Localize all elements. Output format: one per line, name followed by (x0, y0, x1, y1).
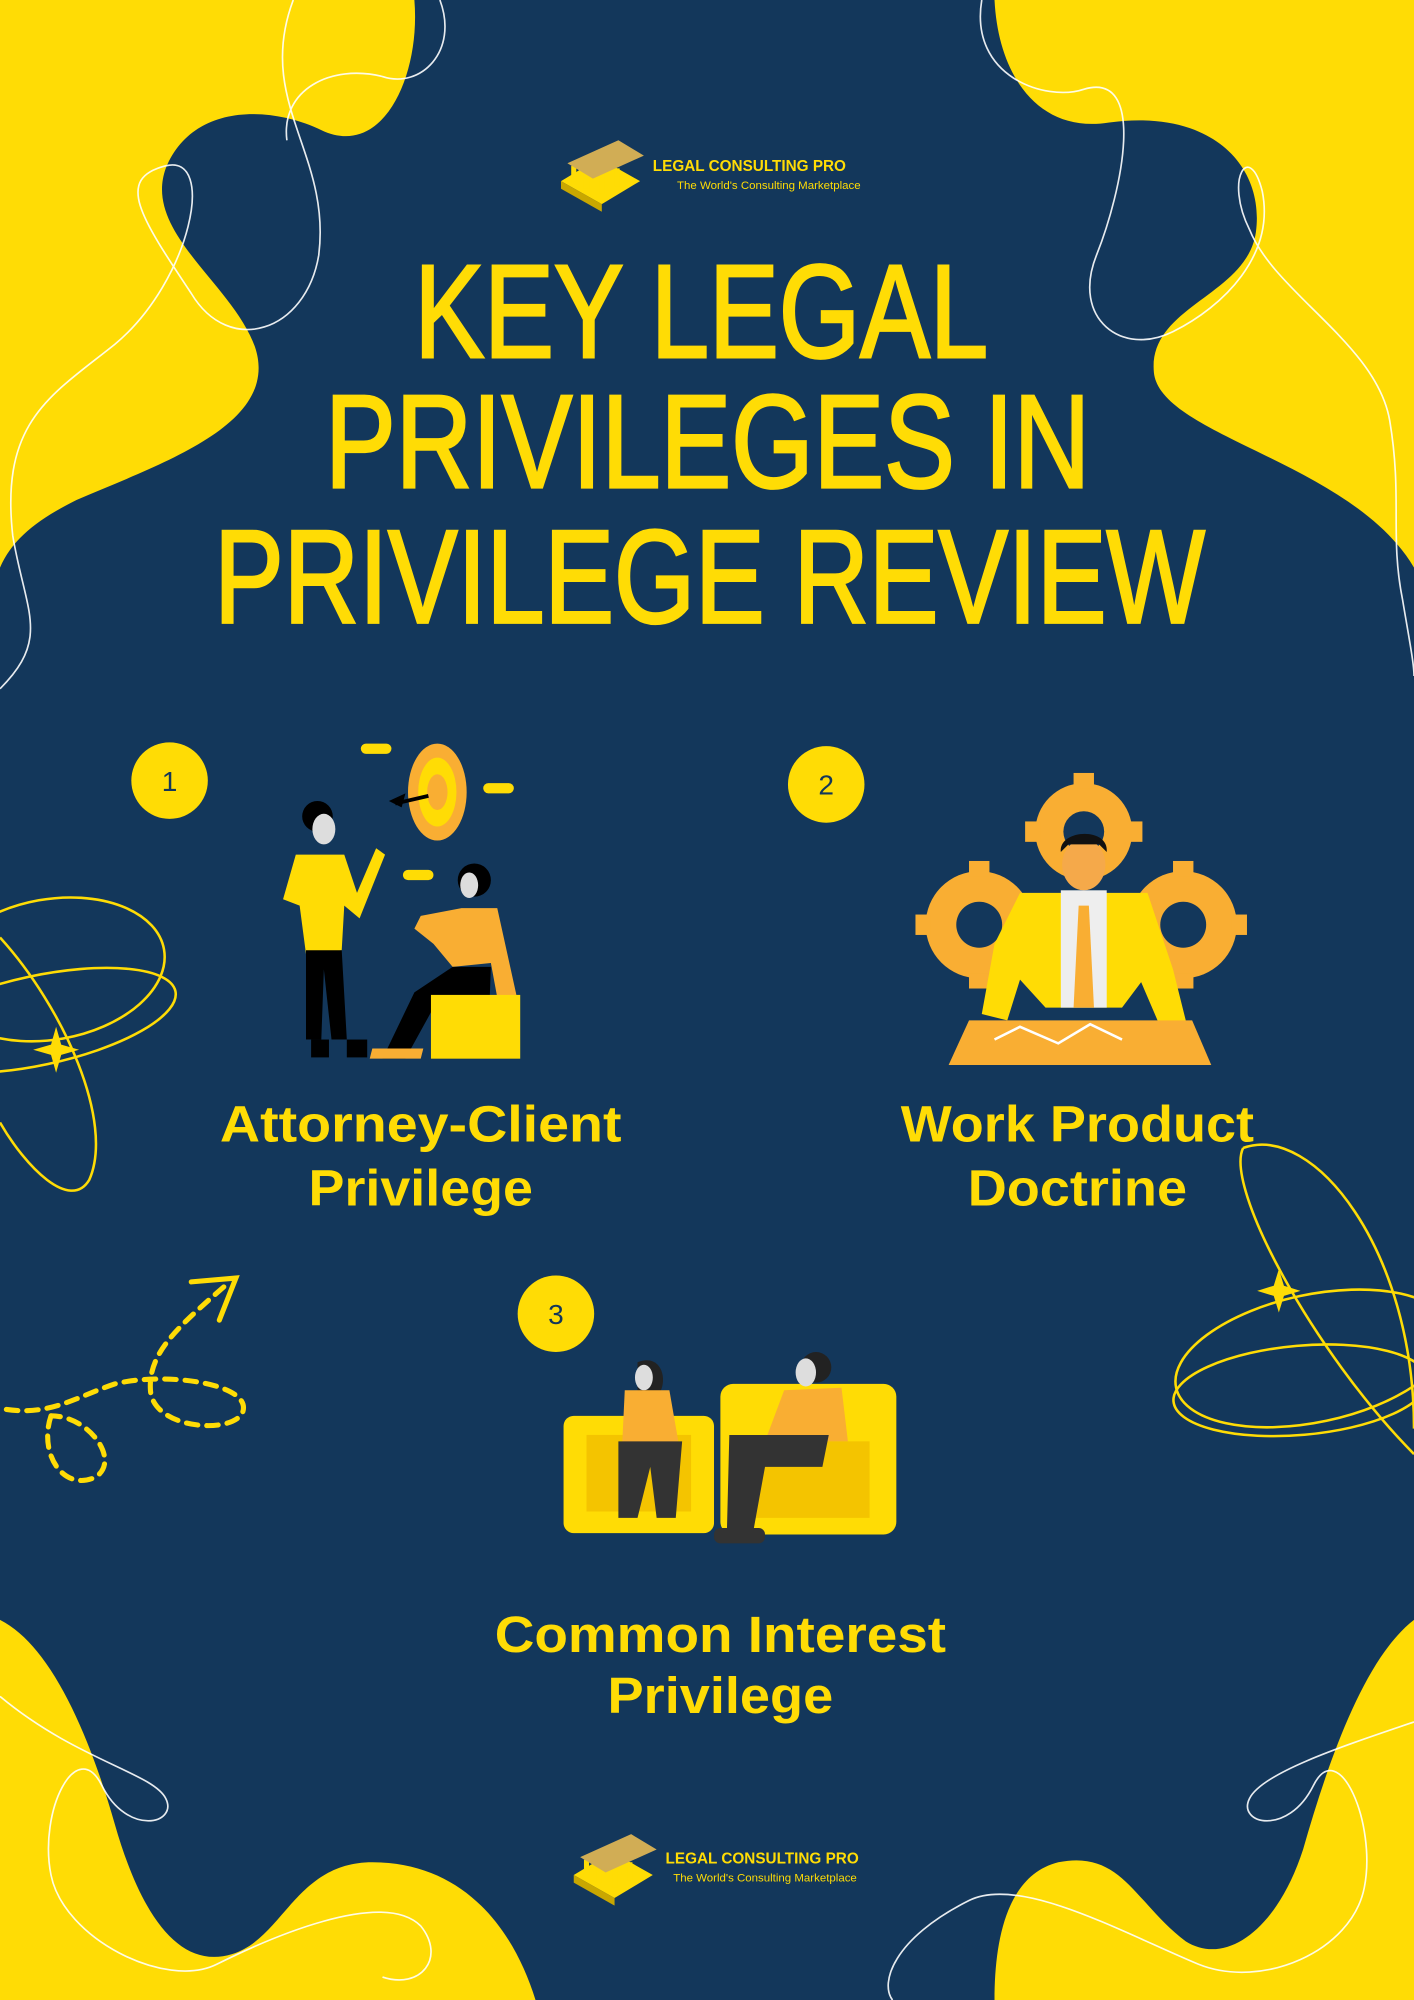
decoration: right yellow orbits with sparkle (1163, 1145, 1414, 1454)
logo: top (561, 140, 861, 212)
number badge 1 (131, 742, 208, 819)
logo: bottom: The World's Consulting Marketplace (673, 1872, 857, 1884)
corner blob: bottom-left (0, 1620, 536, 2000)
corner blob: bottom-right (995, 1620, 1414, 2000)
title (214, 238, 1205, 651)
title: PRIVILEGES IN (325, 368, 1090, 516)
logo: top: LEGAL CONSULTING PRO (653, 158, 846, 175)
label: Attorney-Client Privilege: Attorney-Client (220, 1096, 622, 1153)
label: Work Product Doctrine (901, 1096, 1254, 1216)
number badge 3 (518, 1276, 594, 1352)
decoration: dashed arrow (6, 1278, 243, 1480)
icon: temple (574, 1834, 657, 1906)
corner blob: top-left (0, 0, 415, 568)
logo: top: The World's Consulting Marketplace (677, 180, 861, 192)
logo: bottom (574, 1834, 859, 1906)
number badge 1: 1 (162, 766, 177, 797)
illustration: man at desk with gears (915, 773, 1247, 1065)
illustration: two people in armchairs (564, 1352, 896, 1543)
label: Work Product Doctrine: Doctrine (968, 1159, 1187, 1216)
illustration: attorney-client meeting with target (283, 744, 520, 1059)
number badge 2: 2 (818, 770, 834, 801)
icon: temple (561, 140, 644, 212)
number badge 2 (788, 746, 864, 823)
corner blob: top-right (995, 0, 1414, 568)
label: Common Interest Privilege (495, 1606, 946, 1724)
label: Common Interest Privilege: Privilege (608, 1667, 833, 1724)
title: KEY LEGAL (414, 238, 988, 386)
label: Attorney-Client Privilege: Privilege (309, 1159, 533, 1216)
number badge 3: 3 (548, 1299, 564, 1330)
label: Common Interest Privilege: Common Interest (495, 1606, 946, 1663)
logo: bottom: LEGAL CONSULTING PRO (666, 1851, 859, 1868)
label: Work Product Doctrine: Work Product (901, 1096, 1254, 1153)
label: Attorney-Client Privilege (220, 1096, 622, 1216)
decoration: left yellow orbits with sparkle (0, 880, 185, 1191)
